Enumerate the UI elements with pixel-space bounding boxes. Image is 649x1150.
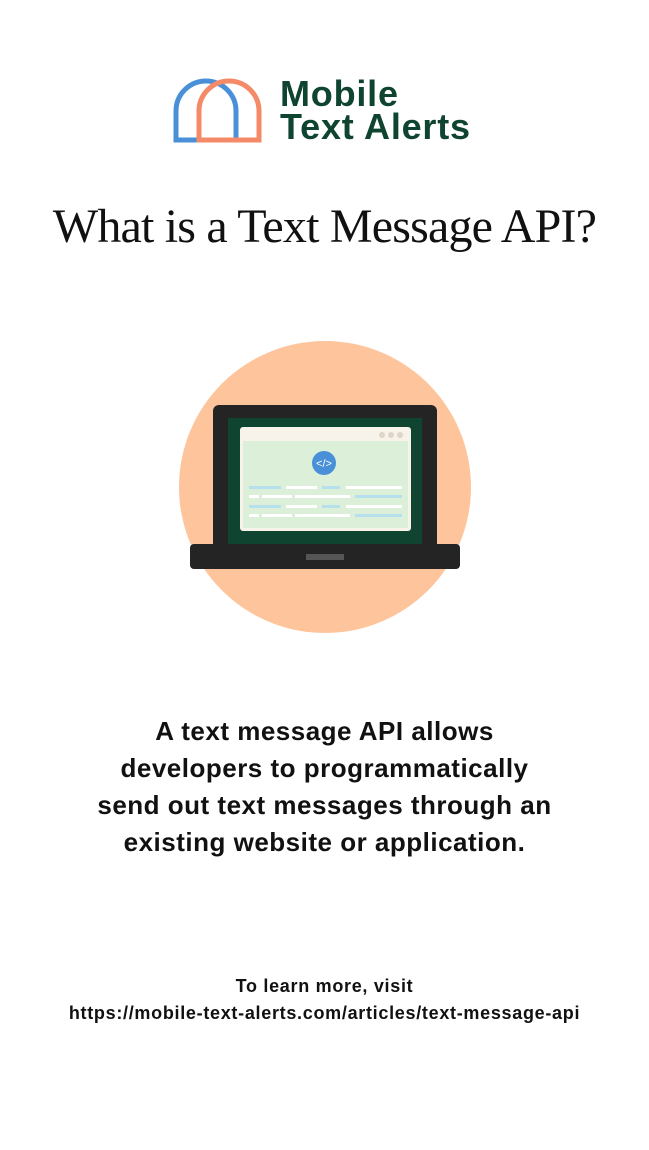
title: What is a Text Message API? [53, 200, 596, 253]
description text [97, 716, 552, 857]
description text: developers to programmatically [120, 753, 529, 783]
logo text: Mobile [280, 73, 399, 114]
logo [174, 73, 471, 147]
logo text [280, 73, 471, 147]
description text: send out text messages through an [97, 790, 552, 820]
logo text: Text Alerts [280, 106, 471, 147]
description text: A text message API allows [155, 716, 494, 746]
icon: logo arches [174, 78, 262, 142]
footer link [69, 976, 580, 1023]
footer link: To learn more, visit [236, 976, 413, 996]
description text: existing website or application. [124, 827, 525, 857]
illustration: laptop [179, 341, 471, 633]
footer link: https://mobile-text-alerts.com/articles/text-message-api [69, 1003, 580, 1023]
icon: code [312, 451, 336, 475]
illustration: laptop: </> [316, 458, 332, 470]
